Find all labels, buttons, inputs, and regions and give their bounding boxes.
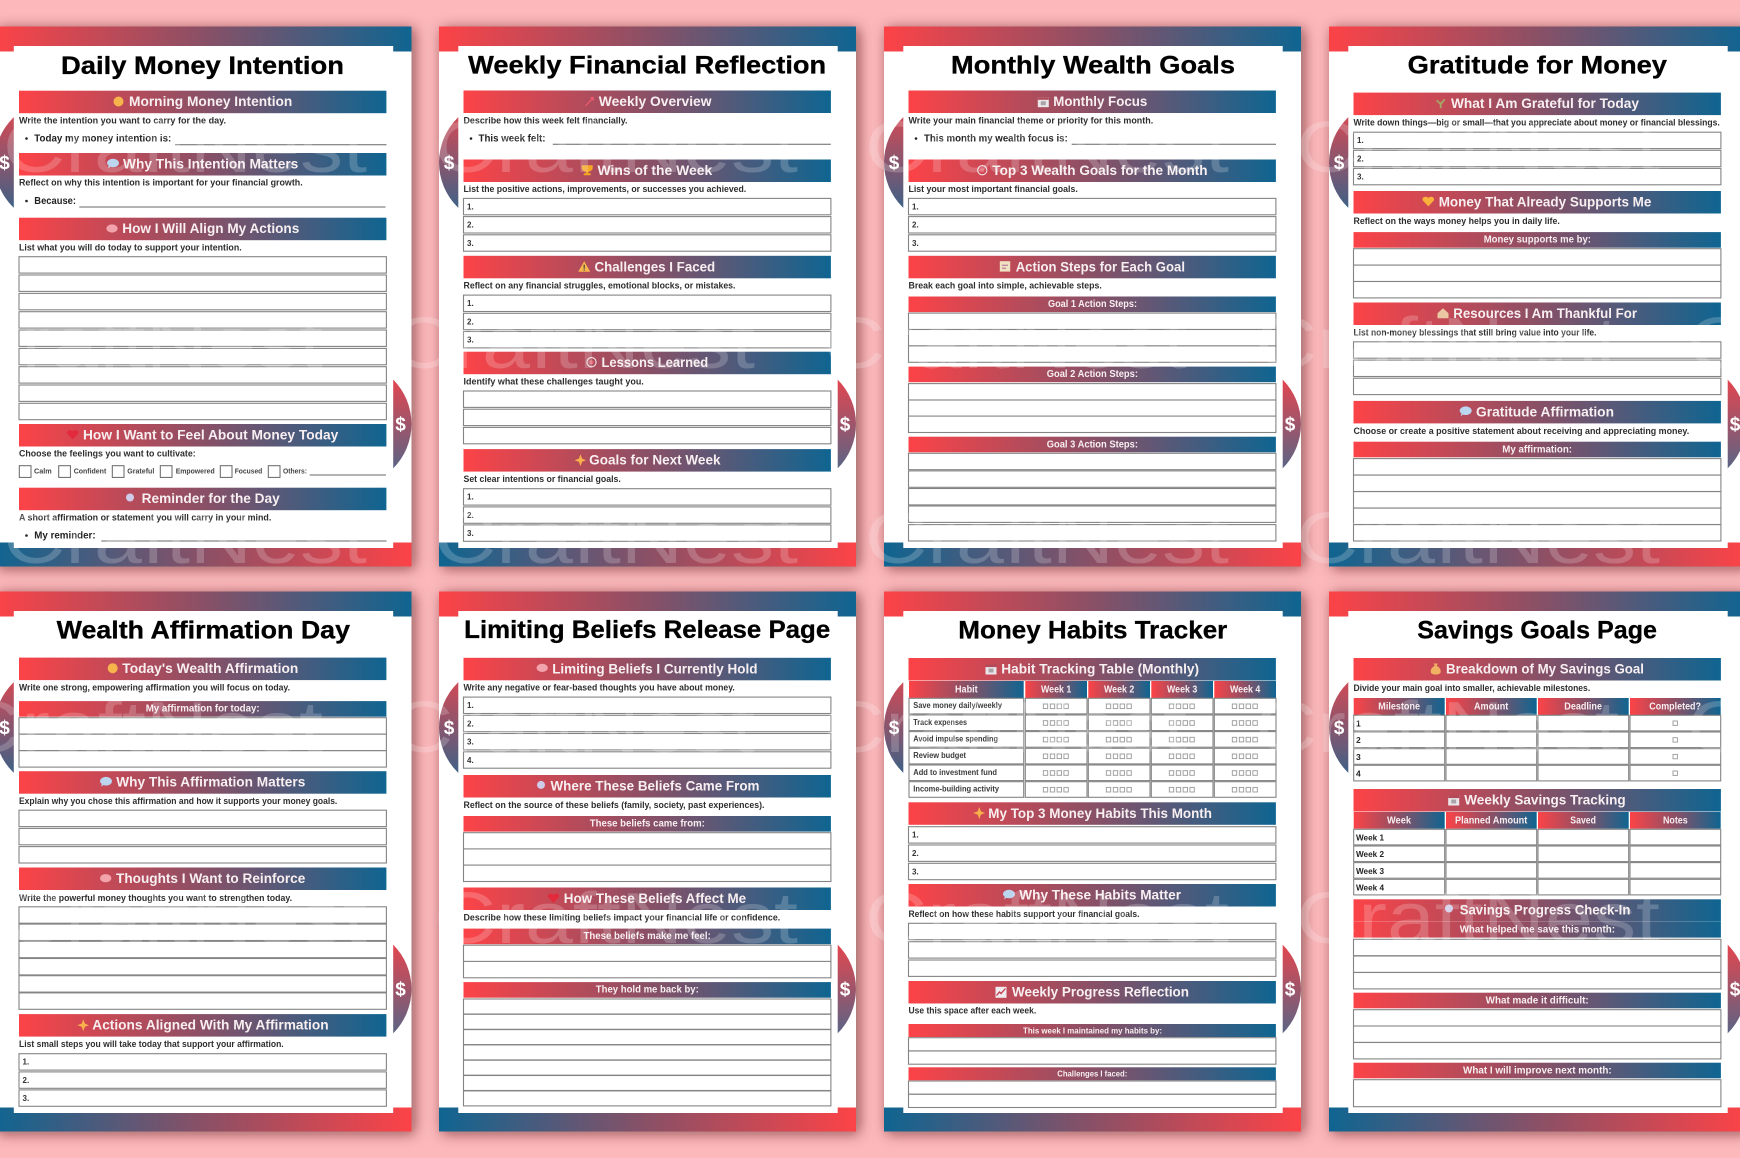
section: Top 3 Wealth Goals for the Month: 2. [912,221,919,230]
title: Weekly Financial Reflection [468,52,826,80]
milestone table: 1 [1356,718,1361,728]
section: Wins of the Week: Wins of the Week [598,163,713,178]
section: What I Am Grateful for Today [1354,93,1721,185]
watermark: CraftNest: CraftNest [1255,304,1619,384]
section: Action Steps for Each Goal: Break each goal into simple, achievable steps. [908,280,1102,290]
section: Wins of the Week: List the positive actions, improvements, or successes you achieved. [464,184,746,194]
section: Monthly Focus: This month my wealth focus is: [924,134,1068,145]
section: Action Steps for Each Goal: Action Steps for Each Goal [1016,259,1185,274]
section: How I Want to Feel About Money Today: Calm [34,466,52,475]
section: Where These Beliefs Came From: Reflect on the source of these beliefs (family, society, past experiences). [464,800,764,810]
section: Top 3 Wealth Goals for the Month: 1. [912,202,919,211]
section: Weekly Progress Reflection: Weekly Progress Reflection [1012,984,1189,1000]
table header: Week 3 [1167,684,1198,695]
section: What I Am Grateful for Today: What I Am Grateful for Today [1451,96,1639,111]
section: Money That Already Supports Me [1354,191,1721,298]
section: Reminder for the Day [19,488,386,541]
section: Actions Aligned With My Affirmation: Actions Aligned With My Affirmation [92,1018,329,1033]
weekly table: Week [1387,815,1412,826]
section: Reminder for the Day: My reminder: [34,530,96,541]
section: Reminder for the Day: Reminder for the Day [142,491,280,506]
section: Goals for Next Week: 3. [467,529,474,538]
section: Weekly Savings Tracking [1354,789,1721,895]
watermark: CraftNest: CraftNest [434,499,798,579]
table header: Week 1 [1041,684,1072,695]
milestone table: Milestone [1378,701,1421,712]
section: Gratitude Affirmation: My affirmation: [1502,444,1572,455]
section: Weekly Overview: This week felt: [478,134,546,145]
section: Limiting Beliefs I Currently Hold: 2. [467,719,474,728]
weekly table: Planned Amount [1455,815,1528,826]
section: Limiting Beliefs I Currently Hold: Write any negative or fear-based thoughts you have about money. [464,683,735,693]
section: How These Beliefs Affect Me [464,888,831,1106]
section: How I Want to Feel About Money Today: Focused [235,466,262,475]
milestone table [1354,698,1721,781]
weekly table: Notes [1663,815,1688,826]
section: How These Beliefs Affect Me: Describe how these limiting beliefs impact your financial life or confidence. [464,913,780,923]
section: Resources I Am Thankful For [1354,302,1721,395]
section: Morning Money Intention [19,91,386,145]
section: Morning Money Intention: Morning Money Intention [129,94,292,109]
section: Where These Beliefs Came From: These beliefs came from: [590,819,705,830]
section: Money That Already Supports Me: Money That Already Supports Me [1439,195,1652,210]
section: Challenges I Faced: 2. [467,317,474,326]
title: Savings Goals Page [1417,617,1657,645]
section: My Top 3 Money Habits This Month [908,802,1276,880]
section: Gratitude Affirmation: Gratitude Affirmation [1476,404,1614,419]
section: Wins of the Week [464,160,831,251]
section: Where These Beliefs Came From [464,775,831,882]
section: How I Will Align My Actions [19,218,386,420]
table rows: Add to investment fund [913,768,997,777]
table header: Habit [955,684,978,695]
section: Why This Intention Matters [19,153,386,207]
section: How I Want to Feel About Money Today: Others: [283,466,307,475]
section: Why This Intention Matters: Why This Intention Matters [123,156,298,172]
watermark: CraftNest [0,108,1740,959]
title: Limiting Beliefs Release Page [464,616,830,644]
section: Limiting Beliefs I Currently Hold: Limiting Beliefs I Currently Hold [552,661,758,676]
section: Goals for Next Week: Goals for Next Week [589,453,721,468]
section: How I Want to Feel About Money Today: How I Want to Feel About Money Today [83,428,339,442]
weekly table: Week 1 [1356,832,1384,842]
section: How I Want to Feel About Money Today: Confident [74,466,107,475]
section: How I Want to Feel About Money Today: Empowered [176,466,215,475]
title: Wealth Affirmation Day [57,617,350,645]
section: Weekly Overview: Describe how this week felt financially. [464,116,628,126]
table header [909,681,1276,698]
section: Goals for Next Week: Set clear intentions or financial goals. [464,474,621,484]
section: Challenges I Faced: Reflect on any financial struggles, emotional blocks, or mistakes. [464,280,736,290]
milestone table: Completed? [1649,701,1701,712]
section: Today's Wealth Affirmation: Today's Wealth Affirmation [122,661,298,676]
milestone table: Amount [1474,701,1509,712]
section: My Top 3 Money Habits This Month: 3. [912,867,919,876]
watermark: CraftNest: CraftNest [1296,108,1660,188]
section: Top 3 Wealth Goals for the Month: List your most important financial goals. [908,184,1078,194]
section: Today's Wealth Affirmation: Write one strong, empowering affirmation you will focus on today. [19,683,290,693]
section: Challenges I Faced: Challenges I Faced [594,259,715,274]
section: Top 3 Wealth Goals for the Month [908,160,1276,251]
section: My Top 3 Money Habits This Month: 2. [912,849,919,858]
watermark: CraftNest: CraftNest [3,879,367,959]
watermark: CraftNest: CraftNest [1255,688,1619,768]
watermark: CraftNest: CraftNest [434,108,798,188]
section: How I Will Align My Actions: How I Will Align My Actions [122,221,299,236]
section: Resources I Am Thankful For: Resources I Am Thankful For [1453,306,1638,321]
section: My Top 3 Money Habits This Month: My Top 3 Money Habits This Month [988,806,1212,821]
section: Habit Tracking Table: Habit Tracking Table (Monthly) [1001,662,1199,676]
section: Wins of the Week: 2. [467,221,474,230]
table rows: Avoid impulse spending [913,734,998,744]
watermark: CraftNest: CraftNest [1296,879,1660,959]
panel: Savings Goals Page [1329,592,1740,1132]
section: Morning Money Intention: Write the intention you want to carry for the day. [19,116,226,126]
section: Breakdown of My Savings Goal: Breakdown of My Savings Goal [1446,662,1644,676]
panel: Monthly Wealth Goals [884,26,1301,566]
milestone table: 2 [1356,735,1361,745]
section: Goals for Next Week: 1. [467,493,474,502]
section: Morning Money Intention: Today my money intention is: [34,134,171,145]
section: Gratitude Affirmation [1354,401,1721,541]
section: Resources I Am Thankful For: List non-money blessings that still bring value into your life. [1354,327,1596,337]
weekly table: Week 4 [1356,882,1384,892]
section: What I Am Grateful for Today: 1. [1357,136,1364,145]
section: Why This Intention Matters: Reflect on why this intention is important for your financial growth. [19,178,303,188]
watermark: CraftNest: CraftNest [3,108,367,188]
watermark: CraftNest: CraftNest [1296,499,1660,579]
section: Why These Habits Matter: Reflect on how these habits support your financial goals. [908,909,1140,919]
panel: Wealth Affirmation Day [0,592,412,1132]
section: Action Steps for Each Goal: Goal 2 Action Steps: [1047,369,1138,380]
section: Thoughts I Want to Reinforce [19,868,386,1009]
section: How These Beliefs Affect Me: These beliefs make me feel: [584,931,711,942]
milestone table: 3 [1356,752,1361,762]
panel: Money Habits Tracker [884,592,1301,1132]
section: How These Beliefs Affect Me: They hold me back by: [596,985,699,996]
section: Challenges I Faced [464,256,831,348]
section: Weekly Progress Reflection: This week I maintained my habits by: [1023,1026,1162,1035]
section: How I Want to Feel About Money Today [19,424,386,477]
title: Daily Money Intention [61,52,344,80]
section: Action Steps for Each Goal [908,256,1276,541]
section: Why These Habits Matter: Why These Habits Matter [1019,888,1182,902]
section: Money That Already Supports Me: Reflect on the ways money helps you in daily life. [1354,216,1560,226]
milestone table: 4 [1356,768,1361,778]
section: Thoughts I Want to Reinforce: Write the powerful money thoughts you want to strengthen today. [19,893,292,903]
watermark: CraftNest: CraftNest [823,304,1187,384]
section: My Top 3 Money Habits This Month: 1. [912,831,919,840]
weekly table: Week 2 [1356,849,1384,859]
milestone table: Deadline [1564,701,1602,712]
watermark: CraftNest: CraftNest [865,499,1229,579]
section: How I Will Align My Actions: List what you will do today to support your intention. [19,243,242,253]
section: Savings Progress Check-In: Savings Progress Check-In [1460,903,1630,918]
section: Actions Aligned With My Affirmation: 1. [22,1058,29,1067]
section: Challenges I Faced: 1. [467,299,474,308]
section: Habit Tracking Table [908,658,1276,797]
section: Wins of the Week: 1. [467,202,474,211]
section: Actions Aligned With My Affirmation: 2. [22,1076,29,1085]
section: Weekly Progress Reflection: Challenges I faced: [1057,1070,1127,1078]
weekly table: Week 3 [1356,866,1384,876]
section: Savings Progress Check-In: What made it difficult: [1486,995,1589,1006]
section: What I Am Grateful for Today: 3. [1357,172,1364,181]
table rows [909,698,1276,797]
section: Action Steps for Each Goal: Goal 1 Action Steps: [1048,299,1137,310]
section: Action Steps for Each Goal: Goal 3 Action Steps: [1047,439,1138,450]
section: Monthly Focus [908,90,1276,144]
section: Top 3 Wealth Goals for the Month: 3. [912,239,919,248]
section: Breakdown of My Savings Goal: Divide your main goal into smaller, achievable milestones. [1354,683,1590,693]
section: How I Want to Feel About Money Today: Choose the feelings you want to cultivate: [19,448,196,458]
section: Monthly Focus: Monthly Focus [1053,94,1147,109]
section: Why This Affirmation Matters: Why This Affirmation Matters [116,775,305,790]
section: Lessons Learned [464,352,831,444]
section: Limiting Beliefs I Currently Hold: 3. [467,738,474,747]
section: Lessons Learned: Lessons Learned [602,355,708,370]
section: Today's Wealth Affirmation: My affirmation for today: [146,704,260,715]
table header: Week 4 [1230,684,1261,695]
panel: Gratitude for Money [1329,26,1740,566]
section: Challenges I Faced: 3. [467,335,474,344]
section: Limiting Beliefs I Currently Hold: 4. [467,756,474,765]
section: Savings Progress Check-In [1354,899,1721,1107]
section: Top 3 Wealth Goals for the Month: Top 3 Wealth Goals for the Month [992,163,1208,178]
table rows: Save money daily/weekly [913,701,1003,710]
section: Weekly Overview [464,90,831,144]
section: Limiting Beliefs I Currently Hold [464,658,831,768]
table header: Week 2 [1104,684,1135,695]
section: Money That Already Supports Me: Money supports me by: [1484,235,1591,246]
watermark: CraftNest: CraftNest [865,108,1229,188]
title: Monthly Wealth Goals [951,52,1235,80]
table rows: Income-building activity [913,785,1000,794]
section: Why These Habits Matter [908,884,1276,976]
table rows: Review budget [913,751,966,760]
section: Why This Intention Matters: Because: [34,196,76,207]
section: Savings Progress Check-In: What helped me save this month: [1460,925,1615,936]
section: Why This Affirmation Matters [19,771,386,863]
watermark: CraftNest: CraftNest [823,688,1187,768]
section: Why This Affirmation Matters: Explain why you chose this affirmation and how it supports your money goals. [19,796,337,806]
title: Money Habits Tracker [958,617,1228,645]
weekly table: Saved [1570,815,1596,826]
section: Actions Aligned With My Affirmation [19,1014,386,1106]
weekly table [1354,812,1721,895]
watermark: CraftNest: CraftNest [865,879,1229,959]
section: Thoughts I Want to Reinforce: Thoughts I Want to Reinforce [116,871,306,886]
section: Lessons Learned: Identify what these challenges taught you. [464,377,644,387]
panel: Weekly Financial Reflection [439,26,856,566]
panel: Limiting Beliefs Release Page [439,592,856,1132]
watermark: CraftNest: CraftNest [3,499,367,579]
panel: Daily Money Intention [0,26,412,566]
section: Goals for Next Week [464,449,831,541]
section: What I Am Grateful for Today: Write down things—big or small—that you appreciate about money or financial blessings. [1354,118,1720,128]
section: Weekly Overview: Weekly Overview [599,94,712,109]
watermark: CraftNest: CraftNest [391,304,755,384]
table rows: Track expenses [913,718,967,727]
section: Actions Aligned With My Affirmation: List small steps you will take today that support your affirmation. [19,1039,284,1049]
title: Gratitude for Money [1408,52,1667,80]
section: Breakdown of My Savings Goal [1354,658,1721,781]
section: Weekly Progress Reflection [908,981,1276,1108]
section: Gratitude Affirmation: Choose or create a positive statement about receiving and appreciating money. [1354,426,1689,436]
section: Monthly Focus: Write your main financial theme or priority for this month. [908,116,1153,126]
section: Actions Aligned With My Affirmation: 3. [22,1094,29,1103]
watermark: CraftNest: CraftNest [434,879,798,959]
section: Weekly Savings Tracking: Weekly Savings Tracking [1464,792,1626,808]
section: What I Am Grateful for Today: 2. [1357,154,1364,163]
section: How I Want to Feel About Money Today: Grateful [127,466,154,475]
section: Today's Wealth Affirmation [19,658,386,767]
section: Wins of the Week: 3. [467,239,474,248]
section: Savings Progress Check-In: What I will improve next month: [1463,1065,1612,1076]
watermark: CraftNest: CraftNest [391,688,755,768]
section: Reminder for the Day: A short affirmation or statement you will carry in your mind. [19,512,271,522]
section: Limiting Beliefs I Currently Hold: 1. [467,701,474,710]
section: How These Beliefs Affect Me: How These Beliefs Affect Me [564,891,747,906]
section: Weekly Progress Reflection: Use this space after each week. [908,1005,1036,1015]
section: Goals for Next Week: 2. [467,511,474,520]
section: Where These Beliefs Came From: Where These Beliefs Came From [550,779,760,794]
